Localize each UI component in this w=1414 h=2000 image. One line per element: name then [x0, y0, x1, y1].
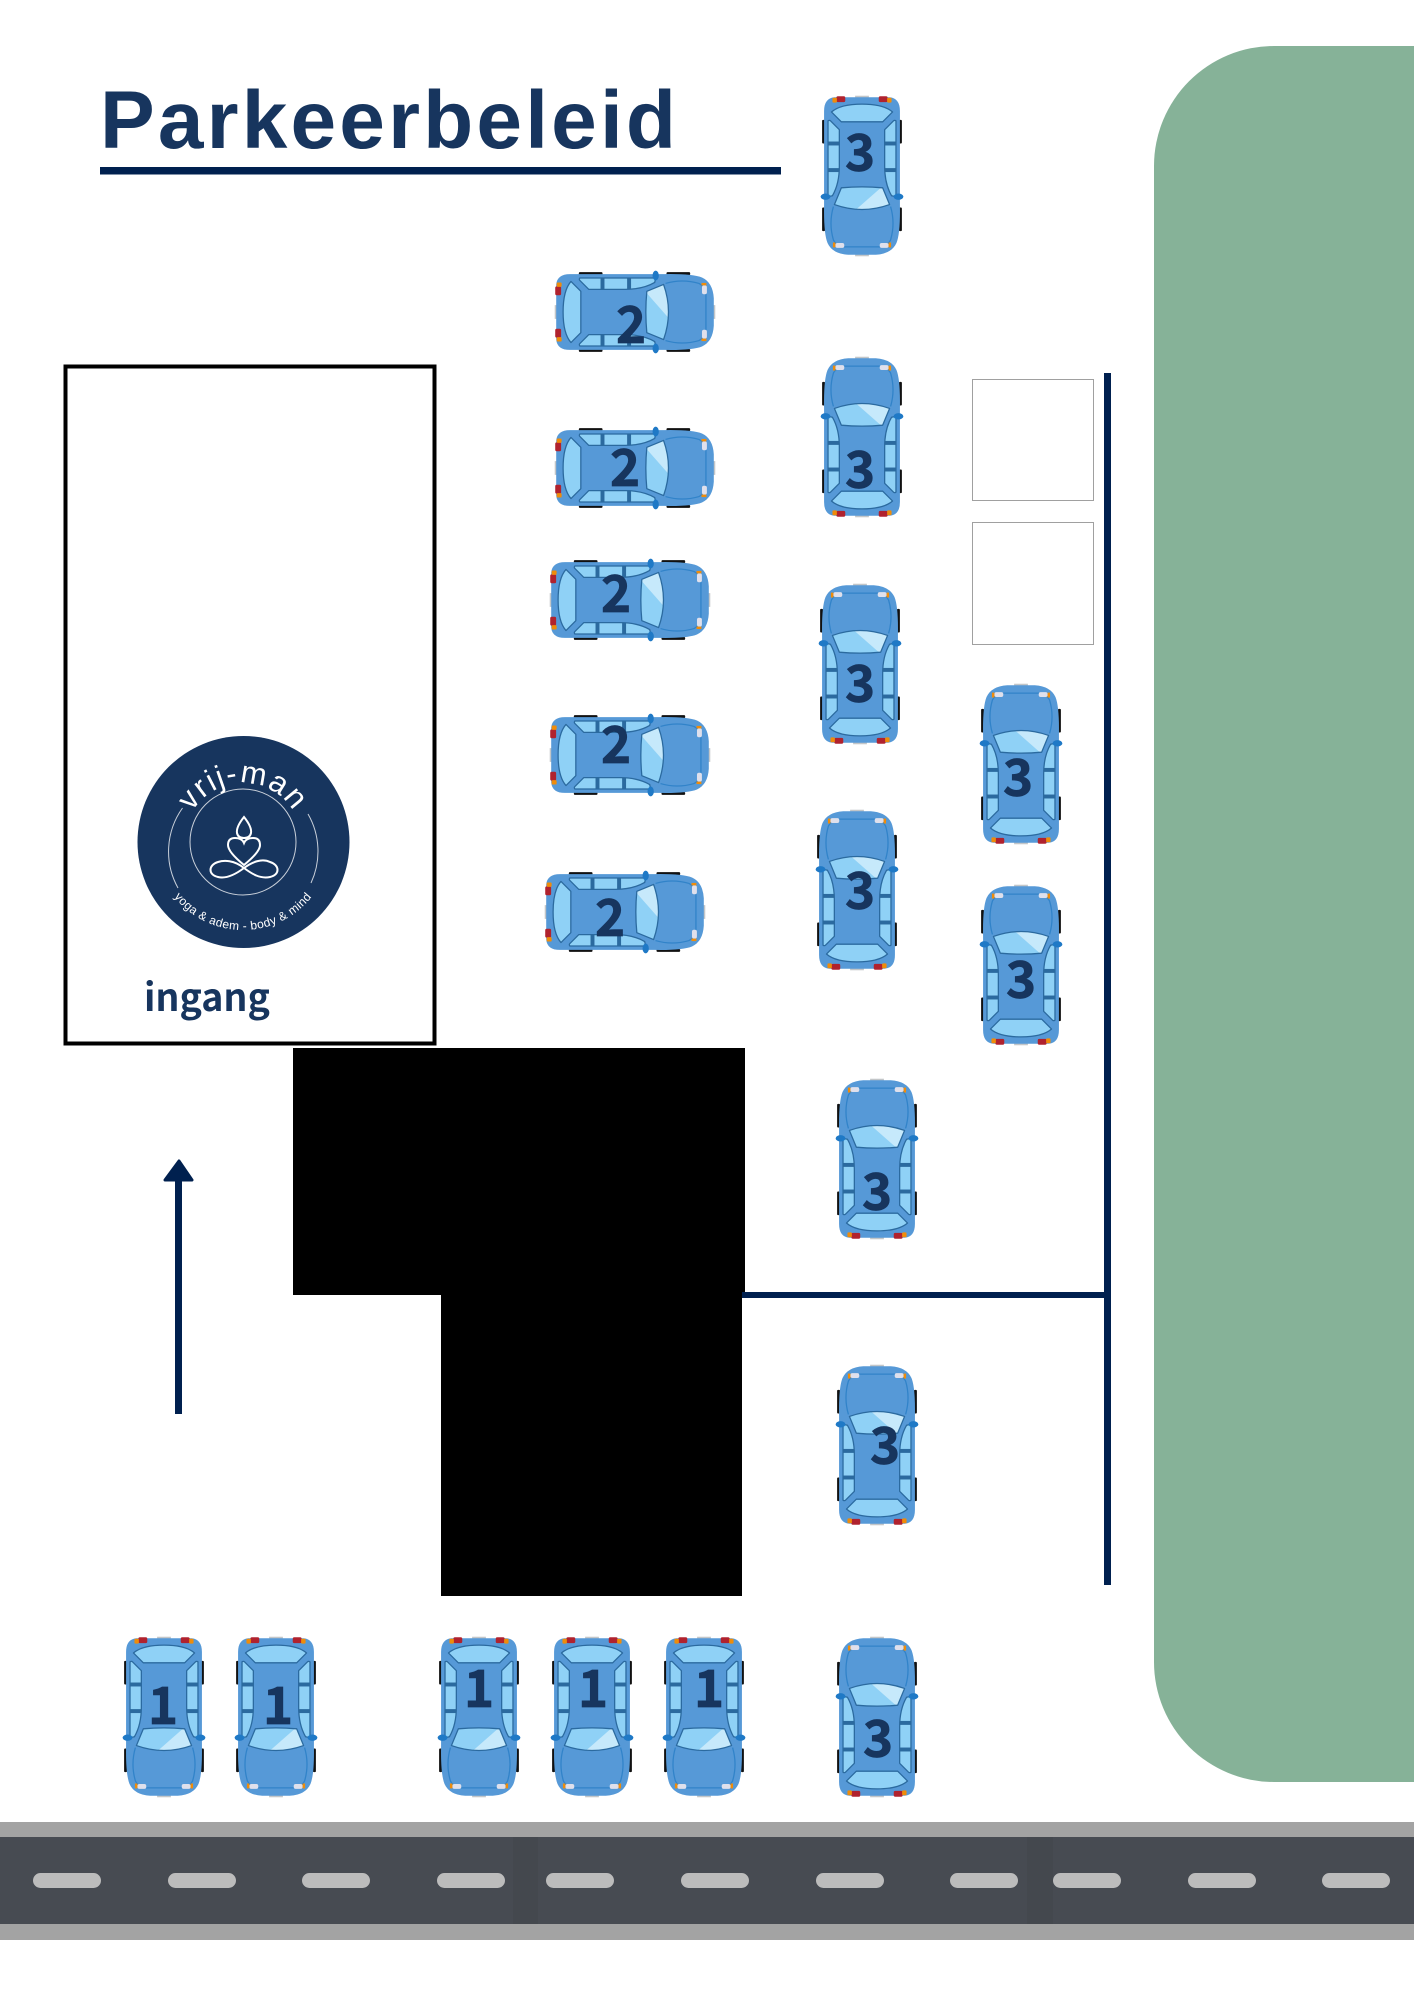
empty parking spot 2 — [972, 522, 1094, 644]
building outline with entrance — [66, 366, 434, 1044]
empty parking spot 1 — [972, 380, 1094, 500]
car 3: 3 — [1006, 939, 1036, 1013]
car 3 — [980, 885, 1062, 1045]
car 3 — [836, 1637, 918, 1797]
label: ingang: ingang — [144, 967, 270, 1022]
car 2 — [555, 427, 715, 509]
logo: vrij-man: vrij-man — [179, 764, 304, 809]
car 3 — [821, 357, 903, 517]
car 1: 1 — [694, 1648, 724, 1722]
car 2: 2 — [610, 427, 640, 501]
title: Parkeerbeleid — [100, 75, 676, 166]
car 2: 2 — [601, 704, 631, 778]
car 3: 3 — [863, 1698, 893, 1772]
car 1 — [235, 1637, 317, 1797]
building footprint — [293, 1048, 745, 1596]
car 3 — [816, 810, 898, 970]
car 1: 1 — [148, 1665, 178, 1739]
road — [0, 1822, 1414, 1940]
car 1: 1 — [263, 1665, 293, 1739]
car 3: 3 — [870, 1405, 900, 1479]
car 3 — [836, 1079, 918, 1239]
car 3 — [819, 584, 901, 744]
car 3: 3 — [845, 429, 875, 503]
icon: flame, heart and infinity — [210, 817, 278, 877]
car 1: 1 — [578, 1648, 608, 1722]
car 3: 3 — [845, 643, 875, 717]
horizontal boundary line — [742, 1292, 1107, 1298]
car 2 — [550, 704, 710, 796]
car 3: 3 — [1003, 737, 1033, 811]
green area — [1154, 46, 1414, 1782]
vertical boundary line — [1104, 373, 1111, 1585]
logo: vrij-man: yoga & adem - body & mind — [172, 892, 312, 930]
car 2 — [555, 271, 715, 358]
car 2 — [545, 871, 705, 953]
car 1 — [123, 1637, 205, 1797]
car 3: 3 — [845, 112, 875, 186]
car 2: 2 — [616, 284, 646, 358]
car 2 — [550, 553, 710, 641]
car 1 — [438, 1637, 520, 1797]
car 3: 3 — [862, 1151, 892, 1225]
arrow to entrance — [165, 1161, 192, 1414]
title underline — [100, 167, 781, 174]
car 1 — [551, 1637, 633, 1797]
car 2: 2 — [595, 877, 625, 951]
car 2: 2 — [601, 553, 631, 627]
logo: vrij-man — [138, 736, 350, 948]
car 3: 3 — [845, 850, 875, 924]
car 3 — [821, 96, 903, 256]
car 3 — [836, 1365, 918, 1525]
car 1 — [663, 1637, 745, 1797]
car 3 — [980, 684, 1062, 844]
car 1: 1 — [464, 1648, 494, 1722]
